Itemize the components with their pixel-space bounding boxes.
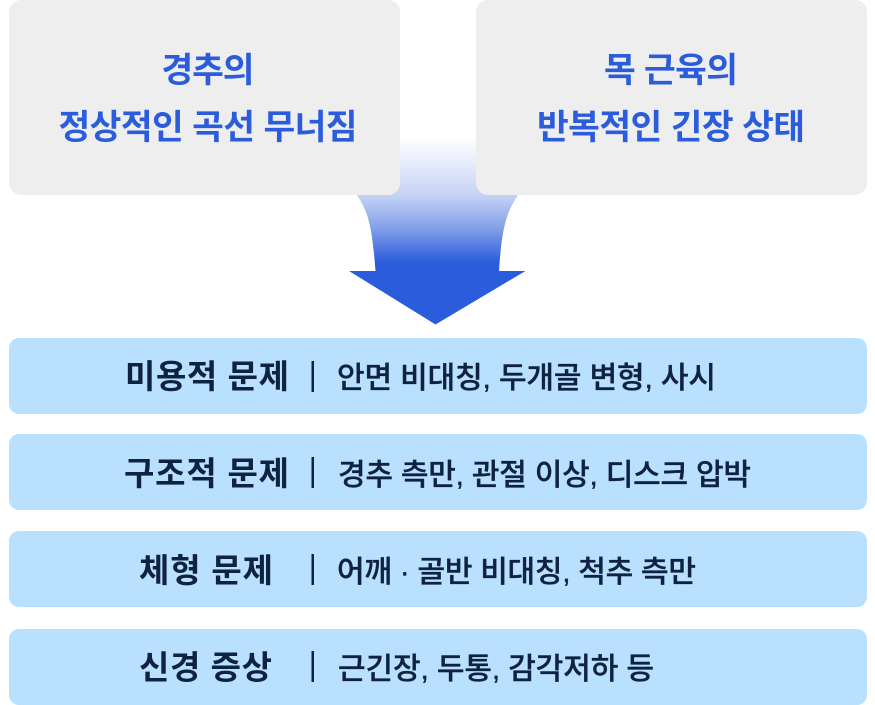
row: cosmetic problems [9, 338, 867, 414]
row: neurological symptoms [9, 629, 867, 705]
row separator [312, 554, 314, 585]
panel: repeated muscle tension [476, 0, 867, 195]
row: body shape problems [9, 531, 867, 607]
row: structural problems [9, 434, 867, 510]
row details: 어깨 · 골반 비대칭, 척추 측만 [337, 556, 696, 589]
row label: 미용적 문제 [125, 358, 289, 395]
row label: 구조적 문제 [124, 455, 289, 492]
row label: 체형 문제 [139, 552, 273, 589]
row separator [312, 651, 314, 682]
arrow: converging causes down to symptoms [345, 130, 530, 324]
row details: 근긴장, 두통, 감각저하 등 [338, 653, 654, 686]
heading: cervical: 경추의 [162, 52, 254, 90]
row separator [312, 457, 314, 488]
heading: repeated tension: 반복적인 긴장 상태 [537, 109, 805, 147]
heading: neck muscles: 목 근육의 [604, 52, 738, 90]
row label: 신경 증상 [139, 649, 272, 686]
panel: cervical curve collapse [9, 0, 400, 195]
row separator [312, 361, 314, 392]
row details: 경추 측만, 관절 이상, 디스크 압박 [338, 459, 751, 492]
row details: 안면 비대칭, 두개골 변형, 사시 [337, 362, 716, 395]
heading: curve collapse: 정상적인 곡선 무너짐 [58, 109, 358, 147]
